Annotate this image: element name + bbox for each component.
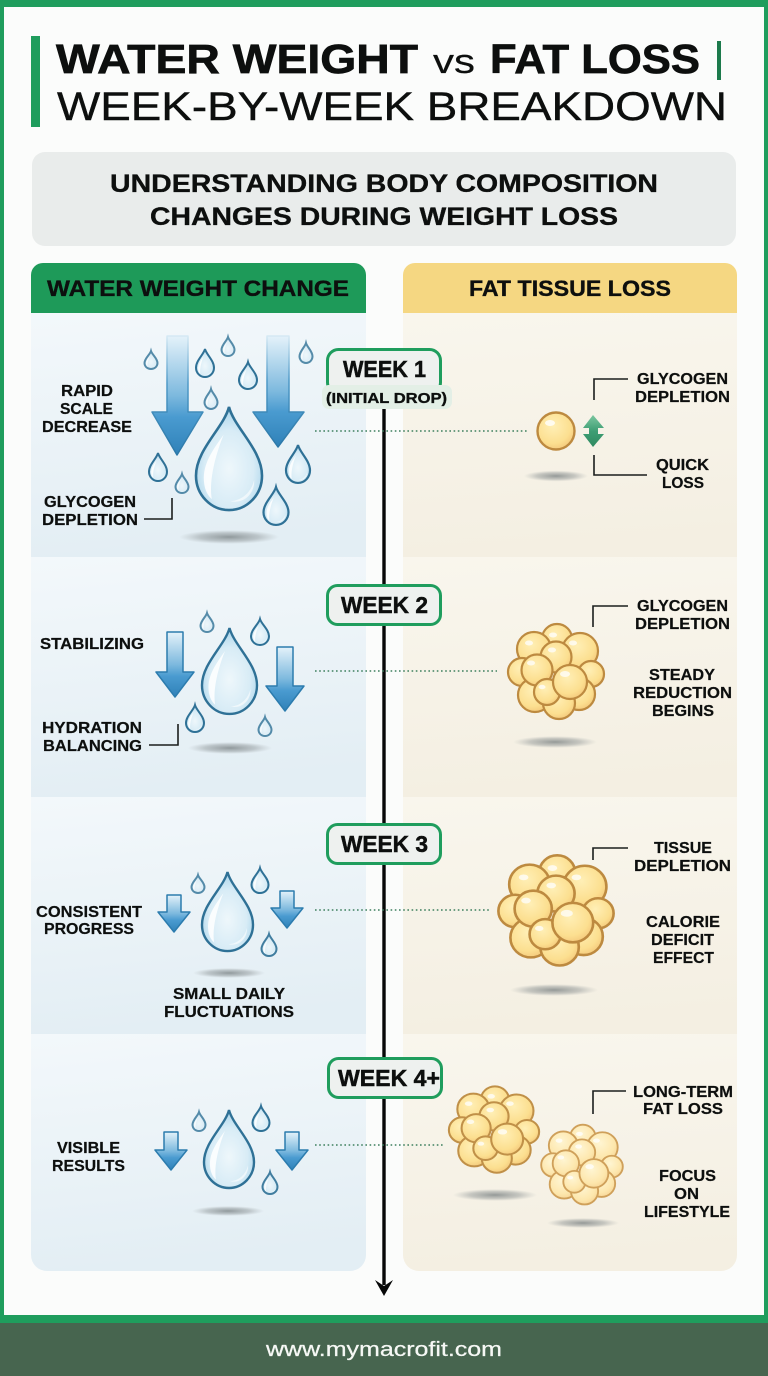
week 1 fat: labels <box>594 371 730 492</box>
subtitle panel: UNDERSTANDING BODY COMPOSITION <box>110 170 658 198</box>
week 3 water: labels: PROGRESS <box>44 921 134 938</box>
title: WEEK-BY-WEEK BREAKDOWN <box>57 85 727 129</box>
badge: week 4+: WEEK 4+ <box>338 1065 440 1091</box>
week 1 water: labels: SCALE <box>60 401 113 418</box>
week 1 water: illustration <box>144 336 312 544</box>
week 3 water: labels <box>36 904 294 1021</box>
week 4 fat: labels: ON <box>674 1186 699 1203</box>
week 2 fat: labels <box>593 598 732 720</box>
week 4 fat: labels: LIFESTYLE <box>644 1204 730 1221</box>
badge: week 1: WEEK 1 <box>343 356 426 382</box>
week 1 fat: labels: DEPLETION <box>635 389 730 406</box>
week 3 fat: labels: CALORIE <box>646 914 720 931</box>
week 1 fat: single fat cell <box>524 412 604 482</box>
badge: week 4+ <box>328 1058 442 1098</box>
week 4 water: labels: RESULTS <box>52 1158 125 1175</box>
badge: week 1: (INITIAL DROP) <box>326 390 447 407</box>
week 2 fat: labels: BEGINS <box>652 703 714 720</box>
week 3 fat: labels: DEFICIT <box>651 932 715 949</box>
week 4 fat: labels <box>593 1084 733 1221</box>
week 2 water: labels: STABILIZING <box>40 636 144 653</box>
week 3 fat: labels: EFFECT <box>653 950 715 967</box>
week 4 fat: labels: FOCUS <box>659 1168 716 1185</box>
week 2 fat: cluster illustration <box>508 624 604 748</box>
timeline arrow <box>375 405 393 1296</box>
week 4 water: illustration <box>155 1106 308 1216</box>
week 2 fat: labels: GLYCOGEN <box>637 598 728 615</box>
week 1 water: labels <box>42 383 172 529</box>
badge: week 2 <box>328 586 440 624</box>
week 2 water: labels: HYDRATION <box>42 720 142 737</box>
week 2 water: illustration <box>156 613 304 754</box>
week 1 fat: labels: QUICK <box>656 457 710 474</box>
week 3 fat: labels: TISSUE <box>654 840 712 857</box>
week 1 fat: labels: GLYCOGEN <box>637 371 728 388</box>
week 4 fat: labels: FAT LOSS <box>643 1101 723 1118</box>
week 3 water: illustration <box>158 868 303 978</box>
week 3 fat: cluster illustration <box>498 855 614 996</box>
badge: week 3: WEEK 3 <box>341 831 428 857</box>
badge: week 3 <box>328 824 440 864</box>
week 4 water: labels: VISIBLE <box>57 1140 120 1157</box>
week 4 fat: two shrinking clusters <box>449 1086 623 1228</box>
week 2 fat: labels: STEADY <box>649 667 716 684</box>
badge: week 2: WEEK 2 <box>341 592 428 618</box>
week 3 water: labels: FLUCTUATIONS <box>164 1004 294 1021</box>
week 3 fat: labels: DEPLETION <box>634 858 731 875</box>
subtitle panel: CHANGES DURING WEIGHT LOSS <box>150 203 618 231</box>
week 2 water: labels: BALANCING <box>43 738 142 755</box>
week 3 water: labels: CONSISTENT <box>36 904 143 921</box>
subtitle panel <box>32 152 736 246</box>
dotted connector lines <box>315 431 527 1145</box>
column header: fat tissue loss <box>403 263 737 313</box>
week 4 fat: labels: LONG-TERM <box>633 1084 733 1101</box>
title: vs <box>433 43 475 81</box>
week 3 fat: labels <box>593 840 731 967</box>
week 1 water: labels: DECREASE <box>42 419 132 436</box>
week 2 fat: labels: DEPLETION <box>635 616 730 633</box>
week 1 water: labels: GLYCOGEN <box>44 494 136 511</box>
week 1 water: labels: RAPID <box>61 383 113 400</box>
week 2 water: labels <box>40 636 178 755</box>
title: FAT LOSS <box>490 36 700 82</box>
title <box>31 36 727 129</box>
footer <box>0 1323 768 1376</box>
column header: water weight change: WATER WEIGHT CHANGE <box>47 276 349 301</box>
week 1 fat: labels: LOSS <box>662 475 704 492</box>
week 1 water: labels: DEPLETION <box>42 512 138 529</box>
column header: water weight change <box>31 263 366 313</box>
title: WATER WEIGHT <box>56 36 418 82</box>
panel: fat column background <box>403 313 737 1271</box>
panel: water column background <box>31 313 366 1271</box>
week 3 water: labels: SMALL DAILY <box>173 986 286 1003</box>
week 4 water: labels <box>52 1140 125 1175</box>
column header: fat tissue loss: FAT TISSUE LOSS <box>469 276 671 301</box>
footer: www.mymacrofit.com <box>265 1339 502 1361</box>
badge: week 1 <box>322 350 452 409</box>
week 2 fat: labels: REDUCTION <box>633 685 732 702</box>
